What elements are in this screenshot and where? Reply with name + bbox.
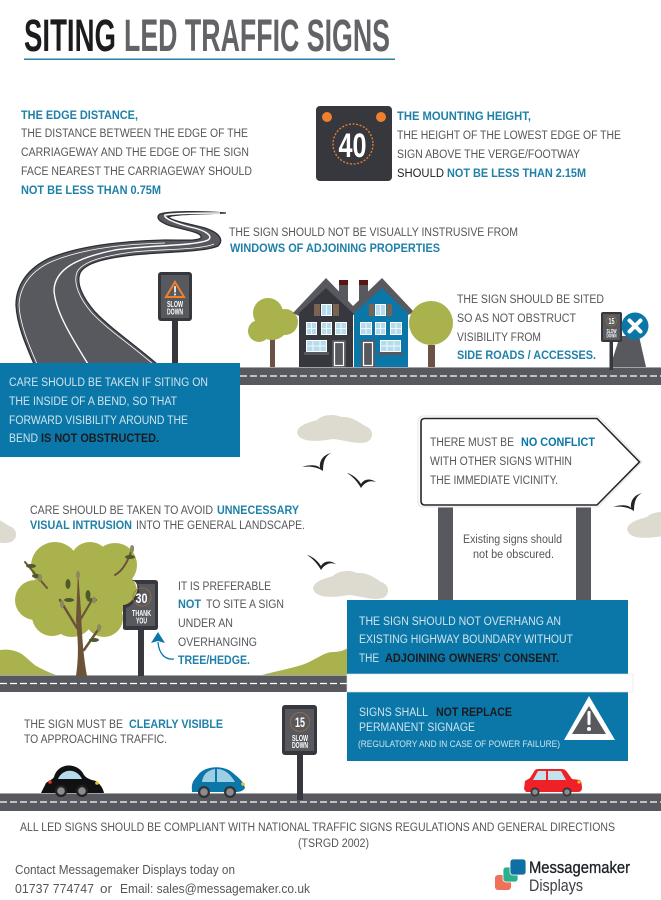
text: compliance statement: ALL LED SIGNS SHOULD BE COMPLIANT WITH NATIONAL TRAFFIC SIGNS REGULATIONS AND GENERAL DIRECTIONS (20, 822, 615, 834)
sign: obstructed with cross: 15 (608, 317, 615, 326)
direction sign: THE IMMEDIATE VICINITY. (430, 475, 558, 487)
icon: 40 sign (316, 106, 392, 181)
cloud (0, 515, 16, 543)
text: contact details: or (100, 882, 112, 896)
direction sign: THERE MUST BE (430, 437, 514, 449)
panel: overhang and replace: THE (359, 653, 379, 665)
text: side roads: VISIBILITY FROM (457, 332, 541, 344)
text: edge distance: THE EDGE DISTANCE, (21, 110, 138, 122)
sign: 30 thank you (123, 580, 158, 676)
text: edge distance: CARRIAGEWAY AND THE EDGE OF THE SIGN (21, 147, 249, 159)
bird (302, 453, 331, 471)
text: clearly visible (24, 719, 223, 746)
text: contact details: 01737 774747 (15, 882, 94, 896)
text: overhanging tree (178, 581, 284, 667)
cloud (313, 571, 388, 599)
logo: Displays (529, 876, 583, 895)
panel: bend visibility (0, 363, 240, 457)
text: overhanging tree: TREE/HEDGE. (178, 655, 250, 667)
panel: bend visibility: BEND (9, 433, 38, 445)
title: SITING (24, 10, 116, 61)
direction sign: WITH OTHER SIGNS WITHIN (430, 456, 572, 468)
text: clearly visible: CLEARLY VISIBLE (129, 719, 223, 731)
sign: 15 slow down (282, 705, 317, 800)
tree: right of houses (409, 301, 453, 367)
direction sign: NO CONFLICT (521, 437, 595, 449)
text: mounting height: SIGN ABOVE THE VERGE/FOOTWAY (397, 149, 580, 161)
text: edge distance: NOT BE LESS THAN 0.75M (21, 185, 161, 197)
text: compliance statement (20, 822, 615, 850)
bird (347, 473, 376, 488)
text: overhanging tree: NOT (178, 599, 201, 611)
text: contact details (15, 863, 311, 896)
car: blue (192, 767, 245, 798)
panel: overhang and replace: NOT REPLACE (436, 707, 512, 719)
text: overhanging tree: IT IS PREFERABLE (178, 581, 271, 593)
sign: 15 slow down: DOWN (292, 741, 308, 750)
panel: overhang and replace: EXISTING HIGHWAY BOUNDARY WITHOUT (359, 634, 573, 646)
text: existing signs (463, 534, 562, 561)
panel: bend visibility: CARE SHOULD BE TAKEN IF SITING ON (9, 377, 208, 389)
text: clearly visible: TO APPROACHING TRAFFIC. (24, 734, 167, 746)
panel: bend visibility: THE INSIDE OF A BEND, SO THAT (9, 396, 177, 408)
text: side roads: SIDE ROADS / ACCESSES. (457, 350, 596, 362)
panel: bend visibility: IS NOT OBSTRUCTED. (41, 433, 159, 445)
text: visual intrusion: UNNECESSARY (217, 505, 299, 517)
sign: 15 slow down: SLOW (292, 734, 308, 743)
tree: left of houses (248, 298, 298, 367)
text: edge distance (21, 110, 252, 197)
sign: obstructed with cross (601, 312, 648, 370)
panel: overhang and replace: (REGULATORY AND IN CASE OF POWER FAILURE) (358, 739, 560, 750)
houses (293, 278, 414, 367)
hills (0, 648, 348, 675)
icon: warning triangle (564, 696, 615, 740)
logo (495, 858, 630, 895)
text: overhanging tree: TO SITE A SIGN (206, 599, 284, 611)
panel: overhang and replace: PERMANENT SIGNAGE (359, 722, 475, 734)
large tree foliage (15, 542, 137, 637)
text: side roads (457, 294, 604, 362)
text: windows of adjoining properties: WINDOWS OF ADJOINING PROPERTIES (230, 243, 440, 255)
sign: warning slow down (158, 272, 192, 364)
text: edge distance: THE DISTANCE BETWEEN THE EDGE OF THE (21, 128, 248, 140)
title: LED TRAFFIC SIGNS (124, 10, 390, 61)
panel: overhang and replace: SIGNS SHALL (359, 707, 429, 719)
text: mounting height: NOT BE LESS THAN 2.15M (447, 168, 586, 180)
text: overhanging tree: UNDER AN (178, 618, 233, 630)
text: windows of adjoining properties (229, 227, 518, 255)
sign: obstructed with cross: SLOW (606, 329, 617, 335)
panel: overhang and replace: THE SIGN SHOULD NOT OVERHANG AN (359, 616, 561, 628)
sign: 30 thank you: THANK (132, 609, 151, 618)
text: side roads: THE SIGN SHOULD BE SITED (457, 294, 604, 306)
text: contact details: Email: sales@messagemaker.co.uk (120, 882, 311, 896)
winding road (16, 212, 226, 364)
text: existing signs: Existing signs should (463, 534, 562, 546)
car: black (41, 765, 104, 797)
text: overhanging tree: OVERHANGING (178, 637, 257, 649)
direction sign (418, 416, 642, 507)
sign: 30 thank you: 30 (136, 591, 148, 606)
road: bottom (0, 793, 661, 811)
text: clearly visible: THE SIGN MUST BE (24, 719, 123, 731)
text: mounting height: SHOULD (397, 168, 444, 180)
bird (307, 555, 336, 570)
sign: obstructed with cross: DOWN (606, 334, 617, 340)
text: compliance statement: (TSRGD 2002) (298, 838, 369, 850)
sign: 15 slow down: 15 (295, 715, 305, 730)
text: visual intrusion (30, 505, 305, 532)
cloud (297, 415, 372, 443)
sign: warning slow down: SLOW (167, 300, 183, 309)
text: windows of adjoining properties: THE SIGN SHOULD NOT BE VISUALLY INSTRUSIVE FROM (229, 227, 518, 239)
panel: overhang and replace: ADJOINING OWNERS' CONSENT. (385, 653, 559, 665)
text: side roads: SO AS NOT OBSTRUCT (457, 313, 576, 325)
cloud (627, 512, 661, 540)
logo: Messagemaker (529, 858, 630, 877)
text: existing signs: not be obscured. (473, 549, 554, 561)
road: middle (0, 675, 347, 692)
text: mounting height: THE MOUNTING HEIGHT, (397, 111, 531, 123)
text: visual intrusion: CARE SHOULD BE TAKEN TO AVOID (30, 505, 213, 517)
sign: 30 thank you: YOU (136, 616, 147, 626)
text: mounting height: THE HEIGHT OF THE LOWEST EDGE OF THE (397, 130, 621, 142)
sign: warning slow down: DOWN (167, 308, 183, 316)
text: mounting height (397, 111, 621, 180)
text: contact details: Contact Messagemaker Displays today on (15, 863, 235, 877)
panel: bend visibility: FORWARD VISIBILITY AROUND THE (9, 415, 188, 427)
road: top (240, 367, 661, 385)
text: edge distance: FACE NEAREST THE CARRIAGEWAY SHOULD (21, 166, 252, 178)
direction sign posts (438, 505, 591, 601)
panel: overhang and replace (347, 600, 633, 761)
large tree trunk and branches (25, 545, 135, 676)
title (24, 10, 390, 61)
text: visual intrusion: VISUAL INTRUSION (30, 520, 132, 532)
text: visual intrusion: INTO THE GENERAL LANDSCAPE. (136, 520, 305, 532)
arrow: points to sign (151, 632, 174, 659)
bird (613, 493, 642, 511)
icon: 40 sign: 40 (338, 127, 366, 165)
car: red (524, 769, 582, 796)
